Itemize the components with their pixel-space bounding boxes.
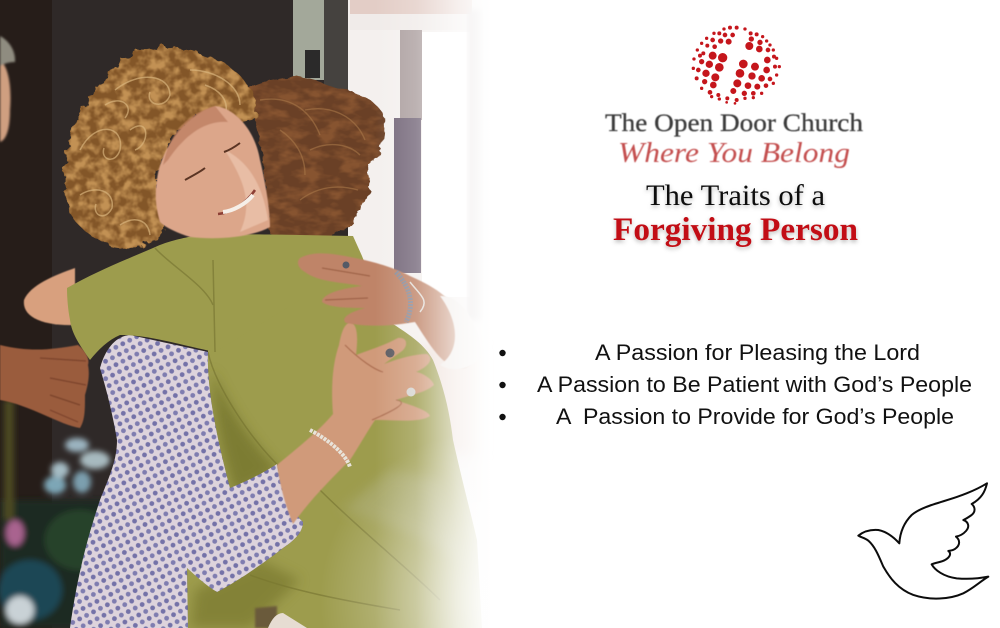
upper hand and wrist [298, 253, 476, 368]
bullet 2: A Passion to Be Patient with God’s People [537, 372, 972, 397]
logo name: The Open Door Church [605, 110, 864, 137]
green shirt folds [208, 352, 440, 610]
patterned blouse [70, 335, 303, 628]
skirt hem at bottom [255, 606, 307, 628]
bullet list of traits [499, 340, 972, 429]
photo background wall [0, 0, 492, 628]
left person face and hair [0, 36, 15, 142]
photo plants and flowers [0, 400, 115, 628]
arm behind green sleeve [24, 268, 75, 325]
bracelets and ring on upper hand [342, 262, 424, 322]
green shirt left sleeve [67, 234, 300, 360]
lower right fade over photo [300, 420, 492, 628]
title [613, 179, 858, 248]
green sleeve seams [155, 248, 215, 352]
icon: dove outline [858, 483, 988, 599]
green shirt shading [190, 370, 460, 628]
title line 2: Forgiving Person [613, 212, 858, 248]
green shirt body [187, 235, 482, 628]
woman's hair curls [80, 70, 240, 235]
title line 1: The Traits of a [646, 179, 825, 212]
rings on lower hand [386, 348, 416, 396]
facial features: closed eyes and smile [185, 143, 255, 214]
left person hand [0, 345, 89, 428]
lower hand and forearm [277, 322, 434, 524]
woman's face [156, 106, 270, 238]
back of head hair [245, 77, 385, 241]
logo: The Open Door Church [605, 26, 864, 169]
icon: dotted globe with cross [692, 26, 780, 104]
photo: two women embracing [0, 0, 492, 628]
back of head hair strands [260, 99, 365, 200]
white cuff of upper arm [440, 296, 482, 369]
white fade over photo [375, 0, 492, 628]
bracelet on lower wrist [310, 430, 350, 467]
bullet 3: A Passion to Provide for God’s People [556, 404, 954, 429]
logo tagline: Where You Belong [618, 138, 850, 169]
bullet 1: A Passion for Pleasing the Lord [595, 340, 920, 365]
woman's curly hair [65, 47, 256, 248]
